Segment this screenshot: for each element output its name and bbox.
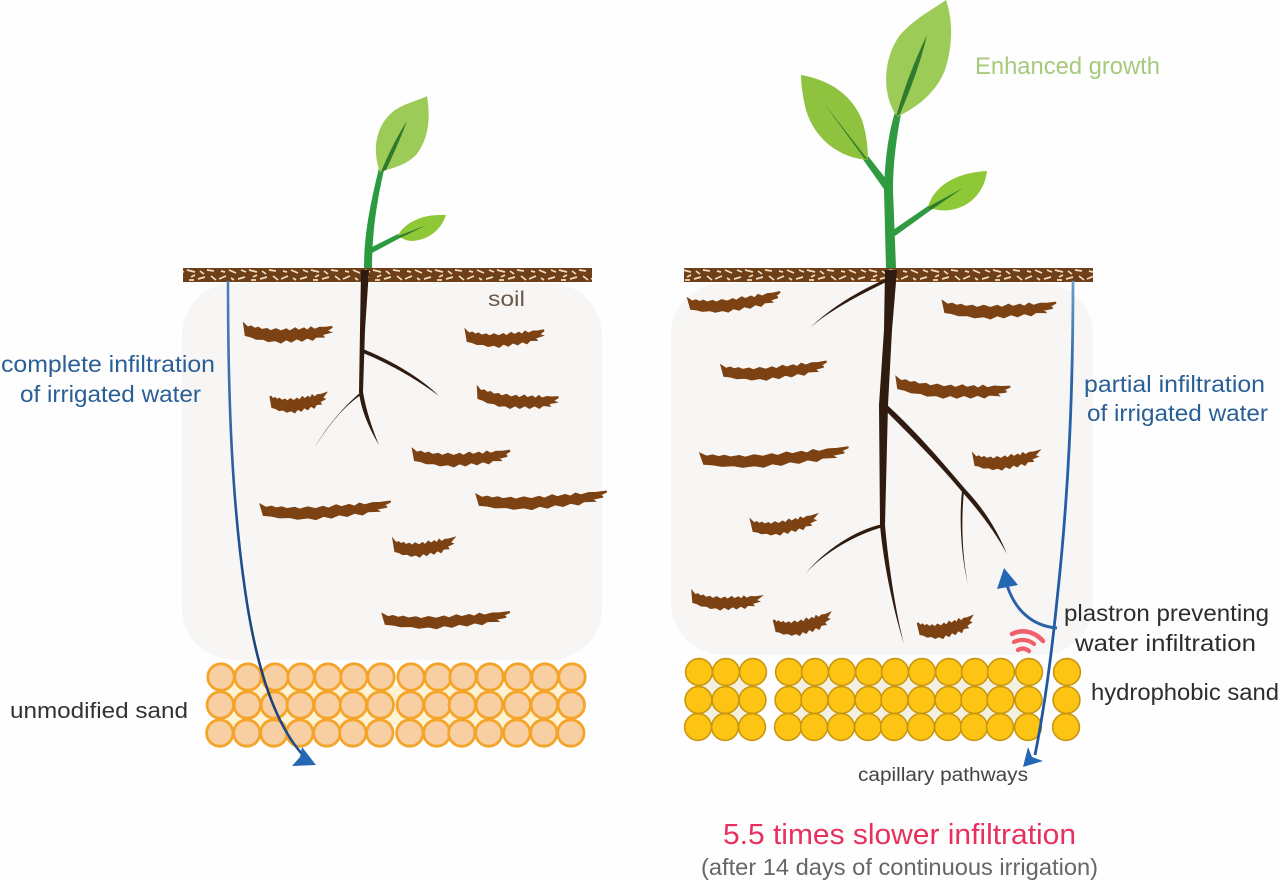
stem [884,112,901,268]
leaf vein: top [896,35,927,117]
leaf vein: left [823,102,868,160]
label: enhanced growth: Enhanced growth [975,53,1160,80]
soil clods [244,324,607,630]
plant: small seedling [228,96,446,766]
leaf: top [886,0,951,117]
label: capillary pathways: capillary pathways [858,765,1028,786]
plant: enhanced seedling [801,0,1073,767]
label: complete infiltration [1,351,215,407]
root system [315,270,439,447]
arrow: plastron deflecting water [997,568,1057,628]
leaf vein: lower [398,225,427,238]
label: plastron: water infiltration [1074,630,1256,656]
leaf: lower [398,215,446,241]
label: unmodified sand: unmodified sand [10,698,188,723]
headline result: 5.5 times slower infiltration [723,819,1076,851]
soil surface band [684,268,1093,282]
icon: plastron signal [1012,631,1043,651]
root system [805,270,1007,644]
soil surface band [183,268,592,282]
stem [364,168,384,268]
soil body [671,283,1093,655]
left branch [862,156,890,192]
label: hydrophobic sand: hydrophobic sand [1091,679,1279,705]
leaf: right [928,171,987,210]
side branch [370,234,400,253]
leaf: left [801,75,868,160]
water arrow: complete infiltration [228,281,316,766]
label: partial infiltration [1084,371,1268,426]
soil clods [688,291,1056,641]
label: partial infiltration: partial infiltration [1084,371,1265,397]
sand layer: unmodified sand [207,664,585,746]
water arrow: partial infiltration [1023,281,1073,767]
label: plastron [1064,600,1269,656]
label: complete infiltration: complete infiltration [1,351,215,377]
label: partial infiltration: of irrigated water [1087,400,1268,426]
label: complete infiltration: of irrigated water [20,381,201,407]
label: plastron: plastron preventing [1064,600,1269,626]
result note: (after 14 days of continuous irrigation) [701,854,1098,880]
leaf vein: upper [381,121,407,172]
sand layer: hydrophobic sand [685,659,1080,740]
leaf vein: right [928,188,963,210]
soil body [182,283,602,660]
right branch [893,206,931,236]
leaf: upper [376,96,429,172]
label: soil: soil [488,288,525,311]
